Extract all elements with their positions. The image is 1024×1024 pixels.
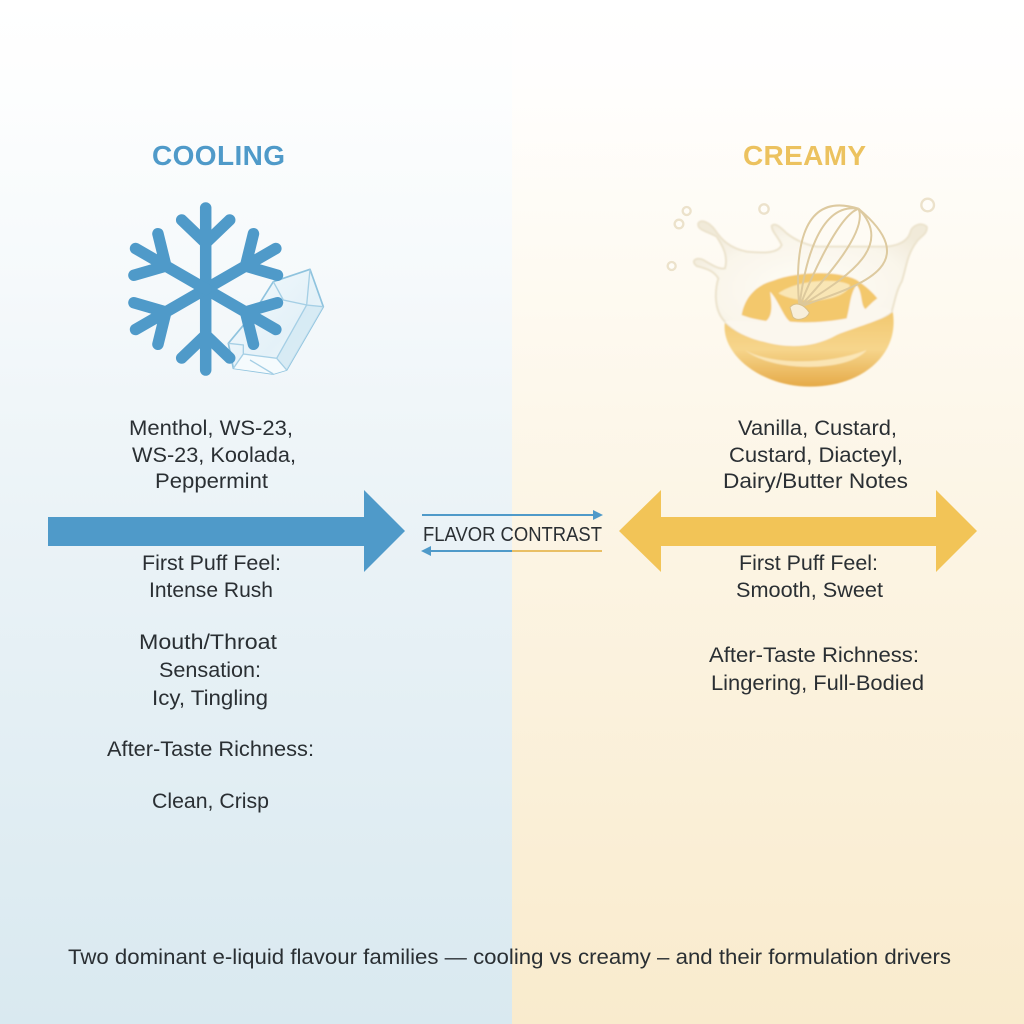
text: cooling first puff feel bbox=[142, 552, 281, 602]
text: cooling after-taste: After-Taste Richness: bbox=[107, 738, 314, 761]
text: creamy ingredients: Custard, Diacteyl, bbox=[729, 444, 903, 467]
label: flavor contrast: FLAVOR CONTRAST bbox=[423, 524, 602, 546]
arrow: contrast top arrow bbox=[422, 510, 603, 520]
text: cooling first puff feel: Intense Rush bbox=[149, 579, 273, 602]
text: creamy first puff feel: First Puff Feel: bbox=[739, 552, 878, 575]
text: creamy after-taste: After-Taste Richness: bbox=[709, 644, 919, 667]
text: cooling ingredients: Peppermint bbox=[155, 470, 268, 493]
text: creamy ingredients: Dairy/Butter Notes bbox=[723, 470, 908, 493]
icon: snowflake bbox=[124, 208, 288, 370]
text: cooling mouth and throat sensation: Icy, Tingling bbox=[152, 687, 268, 710]
text: cooling mouth and throat sensation: Mouth/Throat bbox=[139, 631, 277, 654]
text: creamy first puff feel bbox=[736, 552, 883, 602]
text: creamy after-taste: Lingering, Full-Bodied bbox=[711, 672, 924, 695]
text: creamy first puff feel: Smooth, Sweet bbox=[736, 579, 883, 602]
heading: cooling: COOLING bbox=[152, 140, 285, 171]
icon: custard bowl with milk splash and whisk bbox=[668, 191, 934, 387]
text: cooling ingredients bbox=[129, 417, 296, 493]
text: creamy ingredients bbox=[723, 417, 908, 493]
panel: cooling background bbox=[0, 0, 512, 1024]
text: cooling mouth and throat sensation bbox=[139, 631, 277, 710]
icon: ice crystal bbox=[228, 269, 323, 374]
text: cooling after-taste: Clean, Crisp bbox=[152, 790, 269, 813]
arrow: cooling right arrow bbox=[48, 490, 405, 572]
text: cooling ingredients: Menthol, WS-23, bbox=[129, 417, 293, 440]
text: cooling ingredients: WS-23, Koolada, bbox=[132, 444, 296, 467]
arrow: contrast bottom arrow bbox=[421, 546, 602, 556]
text: cooling mouth and throat sensation: Sensation: bbox=[159, 659, 261, 682]
caption: Two dominant e-liquid flavour families — cooling vs creamy – and their formulation drivers bbox=[68, 946, 951, 969]
text: creamy after-taste bbox=[709, 644, 924, 695]
text: cooling first puff feel: First Puff Feel: bbox=[142, 552, 281, 575]
text: cooling after-taste bbox=[107, 738, 314, 813]
heading: creamy: CREAMY bbox=[743, 140, 866, 171]
panel: creamy background bbox=[512, 0, 1024, 1024]
arrow: creamy double arrow bbox=[619, 490, 977, 572]
text: creamy ingredients: Vanilla, Custard, bbox=[738, 417, 897, 440]
